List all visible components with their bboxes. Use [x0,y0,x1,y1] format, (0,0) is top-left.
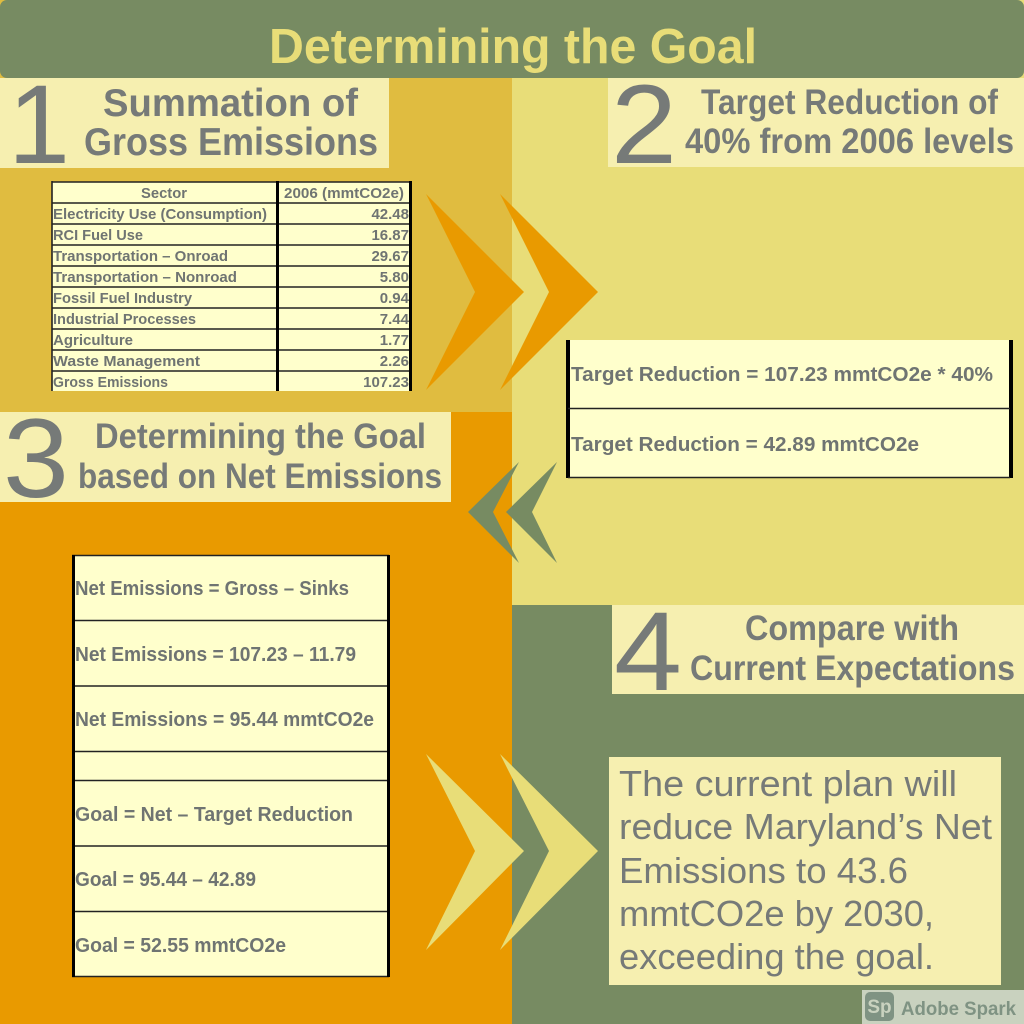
step number 2: 2 [611,62,677,187]
heading text: step 4: Compare with [745,609,959,648]
table: gross emissions by sector: 2.26 [380,353,409,370]
panel: step 2 background [512,0,1024,605]
table: gross emissions by sector: Sector [141,185,187,202]
table: gross emissions by sector: 1.77 [380,332,409,349]
table: gross emissions by sector: Transportation – Onroad [53,248,228,265]
callout: conclusion text: Emissions to 43.6 [619,850,908,891]
table: net emissions and goal calculation: Goal = 95.44 – 42.89 [75,869,256,891]
watermark: Adobe Spark [862,990,1024,1024]
step number 1: 1 [8,62,70,187]
table: gross emissions by sector: 7.44 [380,311,410,328]
heading text: step 1: Summation of [103,82,359,125]
panel: step 1 background [0,0,512,412]
table: gross emissions by sector: Industrial Processes [53,311,196,328]
callout: conclusion text: reduce Maryland’s Net [619,806,992,847]
icon: Sp logo [865,992,894,1021]
title banner [0,0,1024,78]
panel: step 4 background [512,605,1024,1024]
step number 3: 3 [3,396,69,521]
table: target reduction calculation: Target Reduction = 107.23 mmtCO2e * 40% [571,364,993,386]
callout: conclusion text [609,757,1001,985]
table: target reduction calculation: Target Reduction = 42.89 mmtCO2e [571,434,919,456]
table: gross emissions by sector: RCI Fuel Use [53,227,143,244]
callout: conclusion text: exceeding the goal. [619,936,934,977]
table: gross emissions by sector: Electricity Use (Consumption) [53,206,267,223]
heading text: step 4 [690,609,1015,688]
arrow: step 3 to step 4 [426,754,598,950]
table: gross emissions by sector: 42.48 [371,206,409,223]
heading text: step 3 [78,417,442,496]
table: gross emissions by sector: Waste Management [53,353,200,370]
callout: conclusion text: The current plan will [619,763,957,804]
table: gross emissions by sector [52,181,412,391]
table: gross emissions by sector: Transportation – Nonroad [53,269,237,286]
arrow: step 1 to step 2 [426,194,598,390]
heading text: step 2: Target Reduction of [701,83,998,122]
icon: Sp logo: Sp [867,997,892,1018]
table: target reduction calculation [566,340,1013,478]
table: net emissions and goal calculation: Net Emissions = 95.44 mmtCO2e [75,709,374,731]
table: net emissions and goal calculation: Net Emissions = 107.23 – 11.79 [75,644,356,666]
table: net emissions and goal calculation: Net Emissions = Gross – Sinks [75,578,349,600]
table: net emissions and goal calculation [72,555,390,977]
heading: step 1 [0,62,389,187]
arrow: step 2 to step 3 [468,462,557,563]
panel: step 3 background [0,412,512,1024]
table: gross emissions by sector: 5.80 [380,269,409,286]
table: gross emissions by sector: Agriculture [53,332,133,349]
title: Determining the Goal [269,20,757,74]
heading text: step 1: Gross Emissions [84,121,378,164]
table: net emissions and goal calculation: Goal = Net – Target Reduction [75,804,353,826]
table: net emissions and goal calculation: Goal = 52.55 mmtCO2e [75,935,286,957]
heading: step 4 [612,589,1024,714]
heading text: step 3: Determining the Goal [95,417,426,456]
table: gross emissions by sector: Fossil Fuel Industry [53,290,193,307]
table: gross emissions by sector: 0.94 [380,290,410,307]
table: gross emissions by sector: 2006 (mmtCO2e) [284,185,404,202]
heading text: step 1 [84,82,378,164]
callout: conclusion text: mmtCO2e by 2030, [619,893,934,934]
step number 4: 4 [614,589,682,714]
table: gross emissions by sector: 16.87 [371,227,409,244]
table: gross emissions by sector: 107.23 [363,374,409,391]
heading text: step 3: based on Net Emissions [78,457,442,496]
heading: step 3 [0,396,451,521]
watermark: Adobe Spark: Adobe Spark [901,999,1016,1020]
table: gross emissions by sector: 29.67 [371,248,409,265]
table: gross emissions by sector: Gross Emissions [53,374,168,391]
heading text: step 2 [685,83,1014,161]
heading: step 2 [608,62,1024,187]
